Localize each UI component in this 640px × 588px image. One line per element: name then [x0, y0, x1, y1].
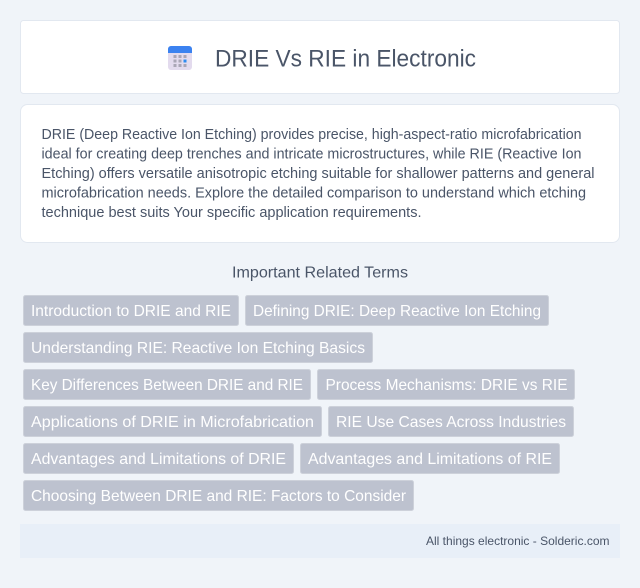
tag — [328, 406, 574, 436]
description text: microfabrication needs. Explore the detailed comparison to understand which etching — [42, 186, 586, 202]
footer — [20, 524, 620, 558]
panel: description — [20, 104, 620, 242]
footer text: All things electronic - Solderic.com — [426, 534, 610, 548]
tag: Understanding RIE: Reactive Ion Etching Basics — [31, 340, 365, 357]
tag — [300, 444, 560, 474]
tag: Advantages and Limitations of RIE — [308, 451, 552, 468]
description text: technique best suits Your specific application requirements. — [42, 205, 422, 221]
tag: Introduction to DRIE and RIE — [31, 303, 231, 320]
tag: RIE Use Cases Across Industries — [336, 414, 566, 431]
tag: Advantages and Limitations of DRIE — [31, 451, 286, 468]
tag: Key Differences Between DRIE and RIE — [31, 377, 303, 394]
title: DRIE Vs RIE in Electronic — [215, 46, 476, 72]
tag — [24, 406, 322, 436]
tag — [24, 480, 414, 510]
tag — [318, 370, 574, 400]
tag — [24, 332, 372, 362]
heading: important related terms: Important Related Terms — [232, 264, 408, 282]
description text — [42, 127, 594, 221]
tag — [24, 370, 310, 400]
tag — [246, 296, 548, 326]
tag: Process Mechanisms: DRIE vs RIE — [326, 377, 568, 394]
header panel — [20, 20, 620, 94]
description text: DRIE (Deep Reactive Ion Etching) provides precise, high-aspect-ratio microfabrication — [42, 127, 582, 143]
tag: Applications of DRIE in Microfabrication — [31, 414, 314, 431]
icon: calendar grid — [168, 46, 192, 70]
tags: related terms — [24, 296, 574, 510]
description text: ideal for creating deep trenches and intricate microstructures, while RIE (Reactive Ion — [42, 146, 582, 162]
tag: Choosing Between DRIE and RIE: Factors to Consider — [31, 488, 407, 505]
tag: Defining DRIE: Deep Reactive Ion Etching — [253, 303, 541, 320]
tag — [24, 296, 238, 326]
description text: Etching) offers versatile anisotropic etching suitable for shallower patterns and general — [42, 166, 594, 182]
tag — [24, 444, 294, 474]
